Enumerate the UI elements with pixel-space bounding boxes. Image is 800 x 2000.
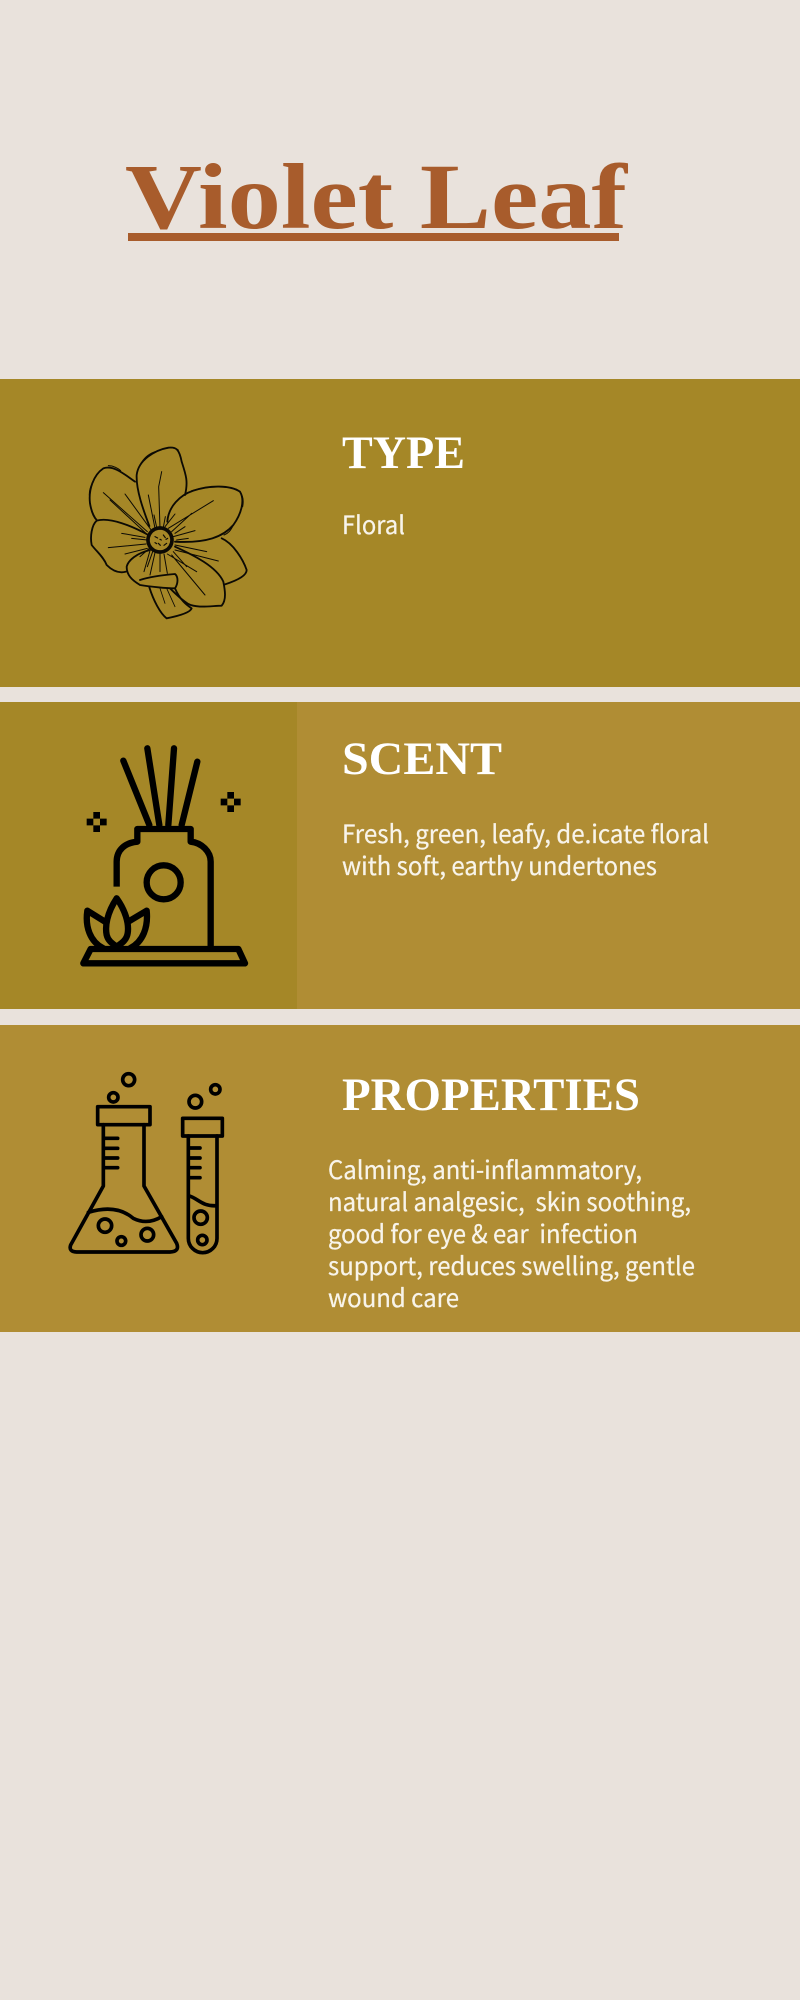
icon: flower: [89, 447, 247, 618]
flower centre: [148, 528, 172, 552]
text: type: Floral: [342, 506, 405, 542]
sparkles: [87, 792, 241, 832]
heading: type: TYPE: [342, 427, 465, 479]
panel: type: [0, 379, 800, 687]
panel: scent: [0, 702, 800, 1009]
text: properties: wound care: [328, 1279, 459, 1315]
icon: lab flask and test tube: [70, 1074, 222, 1253]
text: scent: Fresh, green, leafy, de.icate floral: [342, 815, 709, 851]
text: scent: with soft, earthy undertones: [342, 847, 657, 883]
heading: scent: SCENT: [342, 733, 502, 785]
flower veins: [103, 472, 218, 607]
text: properties: Calming, anti-inflammatory,: [328, 1151, 642, 1187]
text: properties: support, reduces swelling, gentle: [328, 1247, 695, 1283]
panel: properties: [0, 1025, 800, 1332]
icon: reed diffuser: [83, 748, 245, 963]
heading: properties: PROPERTIES: [342, 1069, 640, 1121]
text: properties: [328, 1151, 695, 1315]
text: properties: good for eye & ear infection: [328, 1215, 638, 1251]
text: scent: [342, 815, 709, 883]
title: Violet Leaf: [125, 146, 628, 249]
text: properties: natural analgesic, skin soothing,: [328, 1183, 691, 1219]
